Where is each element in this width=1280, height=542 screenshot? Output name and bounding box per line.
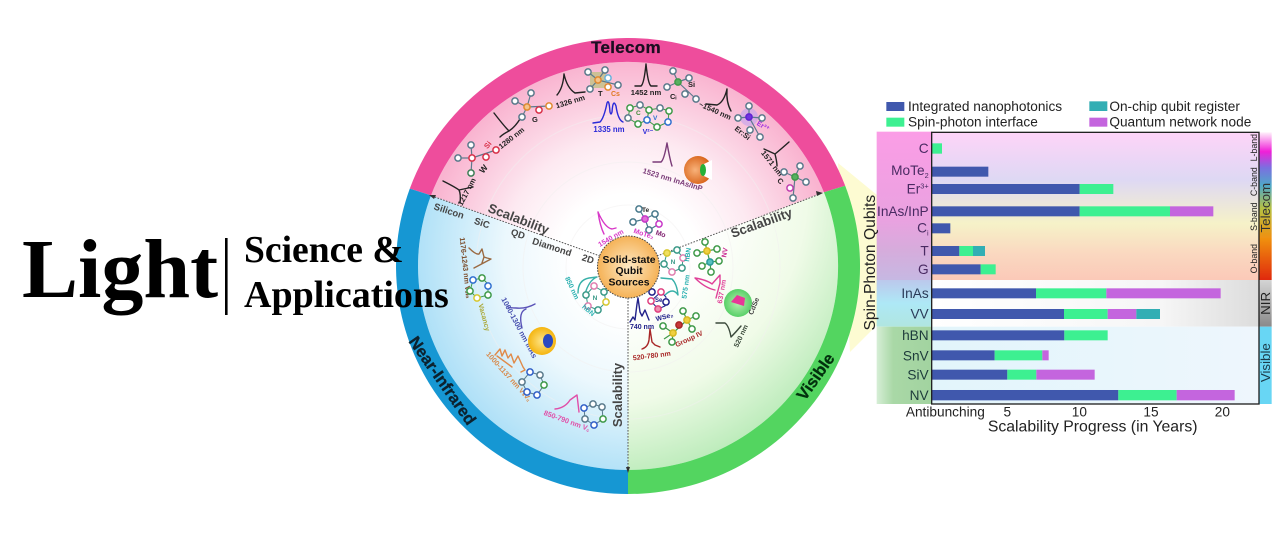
ring: near-infrared — [396, 189, 628, 494]
emitter: ~1540 nm Er: Er:Si — [733, 124, 752, 142]
emitter: 575 nm hBN: 575 nm — [681, 274, 692, 299]
category strip: C-band — [1249, 167, 1259, 196]
row labels: SiV — [907, 367, 930, 382]
emitter: 740 nm WSe2: WSe₂ — [655, 312, 674, 323]
emitter: 1176-1243 nm: Vacancy — [476, 303, 490, 332]
emitter: 740 nm WSe2 — [630, 289, 674, 331]
scalability labels: Scalability — [729, 204, 795, 241]
x axis tick labels — [906, 404, 1230, 419]
central hub: Solid-state Qubit Sources: Solid-state — [602, 255, 656, 266]
legend — [886, 99, 1251, 130]
row labels: InAs — [901, 286, 929, 301]
logo line Science &: Science & — [244, 230, 404, 271]
emitter: 1335 nm V2-: 1335 nm — [593, 125, 625, 134]
emitter: 1452 nm Ci: Cᵢ — [670, 92, 676, 101]
scalability bar chart — [862, 99, 1273, 435]
emitter: 1452 nm Ci: 1452 nm — [631, 88, 661, 97]
x axis tick labels: 15 — [1143, 404, 1159, 419]
emitter: 1523 nm InAs/InP: 1523 nm InAs/InP — [642, 166, 704, 193]
category strip: Visible — [1258, 343, 1273, 382]
emitter: 520 nm CdSe: 520 nm — [733, 324, 750, 349]
legend: Integrated nanophotonics — [908, 99, 1062, 114]
emitter: 1326 nm T — [555, 67, 621, 110]
emitter: 1326 nm T: 1326 nm — [555, 93, 586, 110]
row labels: hBN — [902, 328, 929, 343]
legend: On-chip qubit register — [1109, 99, 1240, 114]
scalability labels — [486, 200, 795, 427]
row labels: G — [918, 262, 929, 277]
pale yellow connector between wheel and chart — [838, 163, 877, 352]
emitter: 1540 nm MoTe2: Mo — [655, 230, 666, 239]
circular wheel diagram — [396, 38, 860, 494]
ring: telecom — [410, 38, 845, 195]
category strip: Telecom — [1258, 183, 1273, 232]
x axis title: Scalability Progress (in Years) — [988, 418, 1197, 435]
bars — [932, 143, 1235, 400]
scalability arrows — [432, 194, 820, 470]
emitter: 850-790 nm — [543, 395, 606, 433]
heading: Visible: Visible — [793, 350, 839, 404]
row labels — [877, 141, 930, 403]
emitter: 1452 nm Ci — [631, 64, 699, 102]
emitter: 1571 nm C: C — [775, 176, 786, 187]
category strip: L-band — [1249, 134, 1259, 161]
row labels: InAs/InP — [877, 204, 929, 219]
row labels: T — [920, 244, 929, 259]
emitter: 520-780 nm Group IV: Group IV — [674, 330, 705, 349]
emitter: 1326 nm T: Cs — [611, 91, 620, 98]
category strip — [1249, 132, 1273, 404]
emitter: 1326 nm T: T — [598, 89, 603, 98]
emitter: 637 nm NV: 637 nm — [717, 279, 728, 304]
row labels: NV — [910, 388, 930, 403]
row labels: 3+ — [920, 182, 929, 191]
emitter: 1335 nm V2-: V — [653, 115, 658, 122]
x axis tick labels: 5 — [1004, 404, 1012, 419]
material labels along arrow — [432, 202, 595, 267]
category strip: S-band — [1249, 202, 1259, 231]
row labels: 2 — [925, 171, 929, 180]
journal logo: Light | Science & Applications — [22, 223, 449, 316]
emitter: 1540 nm MoTe2: MoTe₂ — [632, 228, 654, 241]
emitter: 575 nm hBN: hBN — [684, 247, 693, 262]
x axis tick labels: 20 — [1215, 404, 1230, 419]
row labels: i — [927, 228, 929, 237]
emitter: 520 nm CdSe — [716, 289, 761, 349]
row labels: Er — [907, 181, 920, 196]
material labels along arrow: QD — [509, 227, 526, 242]
emitter: 575 nm hBN — [661, 247, 693, 299]
emitter: 520-780 nm Group IV — [632, 308, 705, 362]
emitter: 1000-1137 nm VsVc: 1000-1137 nm VₛV꜀ — [484, 350, 534, 403]
emitter: 1217 nm W: 1217 nm — [456, 176, 478, 207]
row labels: VV — [910, 307, 930, 322]
arrow heads — [429, 191, 823, 473]
emitter: 740 nm WSe2: Se — [655, 298, 663, 304]
emitter: ~1540 nm Er: ~1540 nm — [697, 100, 733, 122]
heading: Telecom: Telecom — [591, 38, 661, 57]
emitter: 850 nm hBN — [563, 276, 609, 318]
legend: Spin-photon interface — [908, 115, 1038, 130]
emitter: 1540 nm MoTe2 — [597, 206, 666, 249]
emitter: 1000-1300 nm InAs: 1000-1300 nm InAs — [499, 296, 539, 360]
emitter: 1335 nm V2-: C — [636, 110, 641, 117]
emitter: 575 nm hBN: N — [671, 259, 676, 266]
emitter: 1452 nm Ci: Si — [688, 80, 695, 89]
near-infrared emitters — [458, 237, 609, 433]
emitter: 740 nm WSe2: 740 nm — [630, 324, 654, 331]
row labels: C — [919, 141, 929, 156]
telecom emitters — [443, 64, 809, 249]
central hub: Solid-state Qubit Sources: Qubit — [615, 266, 643, 277]
category strip: NIR — [1258, 292, 1273, 315]
emitter: 850 nm hBN: N — [593, 295, 598, 302]
emitter: 520 nm CdSe: CdSe — [748, 297, 761, 316]
emitter: 1540 nm MoTe2: Te — [642, 207, 649, 214]
emitter: 1217 nm W: Si — [482, 139, 493, 151]
plot background bands — [877, 132, 1259, 404]
row labels: SnV — [903, 348, 930, 363]
heading: Near-Infrared: Near-Infrared — [405, 333, 479, 429]
logo divider bar — [225, 238, 228, 315]
central hub: Solid-state Qubit Sources — [598, 236, 660, 298]
emitter: 1280 nm G: G — [532, 115, 538, 124]
ring: visible — [628, 186, 860, 494]
emitter: 1523 nm InAs/InP — [642, 143, 712, 193]
legend: Quantum network node — [1109, 115, 1251, 130]
logo line Applications: Applications — [244, 274, 449, 316]
sector: near-infrared interior — [418, 195, 628, 470]
emitter: 1335 nm V2- — [593, 102, 672, 136]
emitter: 1217 nm W — [443, 139, 499, 207]
sector: telecom interior — [431, 62, 824, 267]
material labels along arrow: 2D — [580, 253, 595, 267]
scalability labels: Scalability — [610, 362, 625, 427]
material labels along arrow: Silicon — [432, 202, 465, 222]
logo word Light: Light — [22, 223, 218, 316]
emitter: 1335 nm V2-: V²⁻ — [643, 129, 654, 136]
emitter: 1280 nm G — [494, 90, 552, 151]
emitter: 1176-1243 nm — [458, 237, 491, 332]
emitter: 520-780 nm Group IV: 520-780 nm — [632, 351, 671, 362]
central hub: Solid-state Qubit Sources: Sources — [608, 278, 650, 288]
scalability labels: Scalability — [486, 200, 552, 238]
emitter: 1540 nm MoTe2: 1540 nm — [597, 229, 625, 249]
material labels along arrow: Diamond — [531, 236, 573, 259]
emitter: 1176-1243 nm: 1176-1243 nm VₛIₙ — [458, 237, 473, 299]
visible emitters — [630, 239, 761, 362]
x axis tick labels: Antibunching — [906, 404, 985, 419]
emitter: 637 nm NV — [694, 239, 730, 304]
x axis tick labels: 10 — [1072, 404, 1087, 419]
emitter: 637 nm NV: NV — [721, 247, 730, 258]
emitter: ~1540 nm Er: Er³⁺ — [755, 120, 771, 133]
emitter: 1571 nm C: 1571 nm — [759, 149, 785, 178]
sector: visible interior — [628, 192, 838, 470]
category strip: O-band — [1249, 244, 1259, 273]
emitter: 1217 nm W: W — [477, 162, 490, 175]
emitter: 850 nm hBN: hBN — [580, 304, 596, 318]
material labels along arrow: SiC — [473, 216, 491, 231]
emitter: 850-790 nm: 850-790 nm V꜀ — [543, 408, 592, 433]
emitter: ~1540 nm Er — [697, 89, 771, 142]
row labels: C — [917, 220, 927, 235]
y axis title: Spin-Photon Qubits — [862, 195, 879, 331]
emitter: 850 nm hBN: 850 nm — [563, 276, 580, 301]
row labels: MoTe — [891, 163, 925, 178]
emitter: 1571 nm C — [759, 142, 809, 201]
emitter: 1280 nm G: 1280 nm — [497, 125, 526, 151]
